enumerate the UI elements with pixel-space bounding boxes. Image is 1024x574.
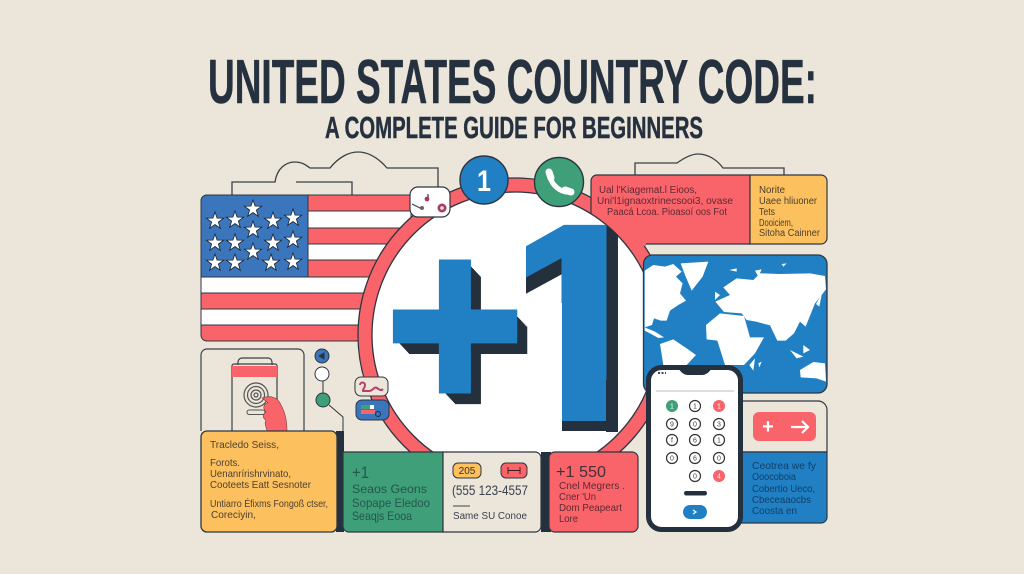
icon: number one badge <box>460 156 508 204</box>
blue card text: Cobertio Ueco, <box>752 483 815 495</box>
blue card text <box>752 460 817 517</box>
panel: red number card: +1 550 <box>556 464 606 481</box>
flag stars <box>206 200 302 270</box>
keypad digits: 0 <box>717 456 721 462</box>
panel: green card: +1 <box>352 464 369 482</box>
panel: orange card: Cooteets Eatt Sesnoter <box>210 479 311 491</box>
keypad digits: 6 <box>693 456 697 462</box>
button: plus and arrow: + <box>762 416 774 438</box>
keypad digits <box>670 404 721 480</box>
panel: orange card: Untiarro Éfixms Fongoß ctser, <box>210 497 328 510</box>
panel: small beige and blue card <box>740 401 827 523</box>
south america <box>660 339 696 365</box>
panel: red number card: Cner 'Un <box>559 491 596 503</box>
red card text: Ual l'Kiagemat.l Eioos, <box>599 185 697 196</box>
keypad digits: 0 <box>693 474 697 480</box>
icon: number one badge: 1 <box>477 165 491 198</box>
chip: orange: 205 <box>459 466 476 477</box>
icon: green phone badge <box>534 158 584 206</box>
red card text: Uni'l1ignaoxtrinecsooi3, ovase <box>597 196 733 207</box>
panel: green card <box>343 452 443 532</box>
panel: orange card: Tracledo Seiss, <box>210 439 279 451</box>
keypad digits: 1 <box>717 438 721 444</box>
central white disc <box>372 192 658 478</box>
orange card text <box>759 185 821 239</box>
greenland <box>681 262 708 291</box>
eurasia <box>715 273 826 341</box>
orange card text: Uaee hliuoner <box>759 196 818 207</box>
panel: top right red and orange card <box>591 175 827 244</box>
outline: cloud shapes <box>232 152 784 195</box>
orange card text: Dooiciem, <box>759 218 793 229</box>
icon: fingerprint <box>244 383 268 407</box>
icon: notes badge <box>410 187 450 217</box>
panel: red number card: Cnel Megrers . <box>559 480 625 492</box>
panel: orange card: Uenanrírishrvinato, <box>210 468 291 480</box>
keypad digits: 9 <box>670 422 674 428</box>
title <box>208 48 817 145</box>
phone <box>648 367 740 530</box>
big plus sign: + <box>386 183 524 464</box>
keypad digits: 0 <box>670 456 674 462</box>
phone call button <box>683 505 707 519</box>
keypad digits: 3 <box>717 422 721 428</box>
icon: small chips <box>355 377 389 420</box>
panel: orange card <box>201 431 344 532</box>
flag canton <box>201 195 308 277</box>
keypad digits: 1 <box>717 404 721 410</box>
big number one: 1 <box>485 164 667 482</box>
central america <box>645 327 664 338</box>
panel: orange card: Forots. <box>210 457 240 469</box>
panel: device illustration <box>201 349 304 431</box>
panel: green card: Seaos Geons <box>352 482 427 496</box>
keypad digits: 0 <box>693 422 697 428</box>
panel: orange card: Coreciyin, <box>211 509 256 521</box>
blue card text: Ceotrea we fy <box>752 460 817 472</box>
blue card text: Coosta en <box>752 505 797 517</box>
panel: green card: Seaqjs Eooa <box>352 509 412 523</box>
islands <box>715 263 826 382</box>
keypad digits: 1 <box>693 404 697 410</box>
subtitle: A COMPLETE GUIDE FOR BEGINNERS <box>325 110 703 145</box>
icon: hand <box>262 397 287 431</box>
keypad digits: 1 <box>670 404 674 410</box>
flag <box>201 195 420 341</box>
blue card text: Cbeceaaocbs <box>752 494 811 506</box>
chip: red <box>501 463 527 478</box>
red card text <box>597 185 733 218</box>
keypad digits: f <box>671 438 673 444</box>
panel: red number card: Dom Peapeart <box>559 502 622 514</box>
blue card text: Ooocoboia <box>752 471 796 483</box>
panel: beige phone number card <box>443 452 551 532</box>
connector dots <box>315 349 343 431</box>
panel: green card: Sopape Eledoo <box>352 496 430 510</box>
panel: beige phone number card: (555 123-4557 <box>452 482 528 498</box>
panel: world map <box>644 255 827 393</box>
phone keypad <box>666 400 725 482</box>
depth shading of the number one <box>606 380 618 432</box>
keypad digits: 4 <box>717 474 721 480</box>
keypad digits: 6 <box>693 438 697 444</box>
north america <box>645 264 686 327</box>
panel: red number card <box>549 452 638 532</box>
panel: beige phone number card: Same SU Conoe <box>453 510 527 522</box>
orange card text: Tets <box>759 207 775 218</box>
panel: red number card: Lore <box>559 513 578 525</box>
red card text: Paacá Lcoa. Pioasoí oos Fot <box>607 207 727 218</box>
orange card text: Sitoha Cainner <box>759 228 821 239</box>
africa <box>706 313 764 365</box>
central ring <box>358 178 672 492</box>
orange card text: Norite <box>759 185 785 196</box>
